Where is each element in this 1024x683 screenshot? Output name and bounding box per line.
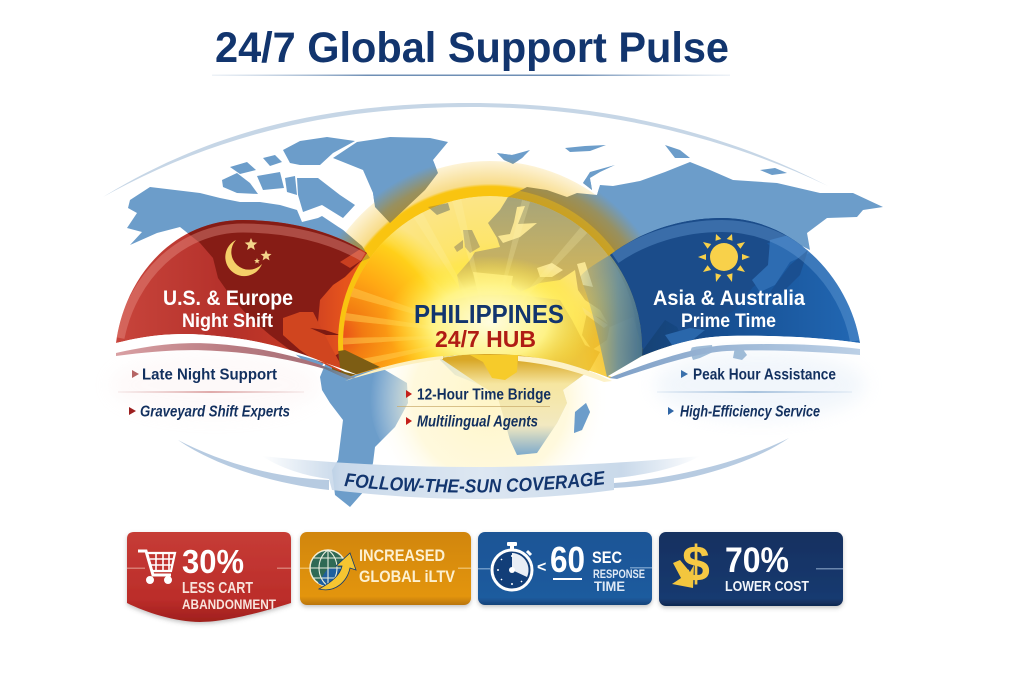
dark land in red dome [117, 220, 367, 372]
panel: less cart abandonment [127, 532, 291, 622]
label: sec: SEC [592, 548, 622, 567]
title: 24/7 Global Support Pulse [215, 24, 729, 72]
text block: center bullet list: 12-Hour Time Bridge [417, 386, 551, 404]
heading: Night Shift: Night Shift [182, 311, 274, 332]
heading: Prime Time: Prime Time [681, 311, 776, 332]
underline: 60 [553, 578, 582, 580]
world map [127, 137, 883, 507]
banner: follow-the-sun coverage: FOLLOW-THE-SUN COVERAGE [344, 471, 604, 493]
text block: center bullet list [397, 386, 551, 430]
Africa gold tail [470, 355, 518, 380]
icon: dollar with down arrow: $ [682, 536, 710, 592]
soft halo under left dome [110, 353, 320, 417]
icon: shopping cart [138, 551, 175, 582]
panel: increased global iLTV [300, 532, 471, 605]
pale inland seas [473, 206, 608, 328]
text block: left bullet list: Late Night Support [142, 366, 278, 384]
right lower arc [614, 438, 789, 488]
central sun band right [518, 356, 612, 382]
South America dark top [332, 350, 380, 378]
Africa lower land [440, 350, 592, 455]
icon: crescent moon and stars [225, 238, 272, 276]
heading: Philippines: PHILIPPINES [414, 299, 564, 329]
heading: U.S. and Europe: U.S. & Europe [163, 287, 293, 310]
text block: right bullet list: Peak Hour Assistance [693, 366, 836, 384]
panel: lower cost [659, 532, 843, 606]
text block: left bullet list [118, 366, 304, 420]
panel: Philippines sun [330, 153, 671, 378]
panel: Asia and Australia prime time dome [580, 218, 860, 379]
text block: right bullet list: High-Efficiency Service [680, 404, 820, 420]
icon: stopwatch [492, 542, 532, 590]
label: global iLTV: GLOBAL iLTV [359, 567, 456, 586]
label: abandonment: ABANDONMENT [182, 596, 276, 612]
stat: 60: 60 [550, 539, 585, 580]
icon: sun [698, 234, 750, 282]
label: less than: < [537, 559, 546, 576]
stat: 30%: 30% [182, 543, 244, 580]
blue dome swoosh [608, 336, 860, 377]
title underline [212, 74, 730, 76]
banner: follow-the-sun coverage [273, 458, 690, 499]
text block: center bullet list: Multilingual Agents [417, 414, 538, 430]
soft halo under right dome [655, 351, 865, 419]
label: less cart abandonment: LESS CART [182, 580, 253, 597]
Indonesia and Australia islands [690, 345, 747, 360]
text block: left bullet list: Graveyard Shift Experts [140, 404, 290, 420]
red dome swoosh [116, 334, 358, 375]
panel: response time [478, 532, 652, 605]
left lower arc [178, 440, 329, 490]
infographic canvas [104, 31, 883, 626]
stat: 70%: 70% [725, 541, 789, 580]
land in blue dome [610, 218, 860, 350]
icon: globe with rising arrow [310, 550, 356, 590]
heading: 24/7 Hub: 24/7 HUB [435, 326, 536, 352]
label: response: RESPONSE [593, 567, 645, 581]
Madagascar [574, 403, 590, 433]
text block: right bullet list [657, 366, 852, 420]
label: lower cost: LOWER COST [725, 578, 809, 595]
central sun band left [345, 356, 443, 381]
label: time: TIME [594, 578, 625, 594]
label: increased: INCREASED [359, 546, 445, 565]
heading: Asia and Australia: Asia & Australia [653, 287, 805, 310]
panel: U.S. and Europe night shift dome [116, 220, 367, 379]
lower cream glow [370, 300, 610, 500]
top globe arc [103, 103, 828, 197]
